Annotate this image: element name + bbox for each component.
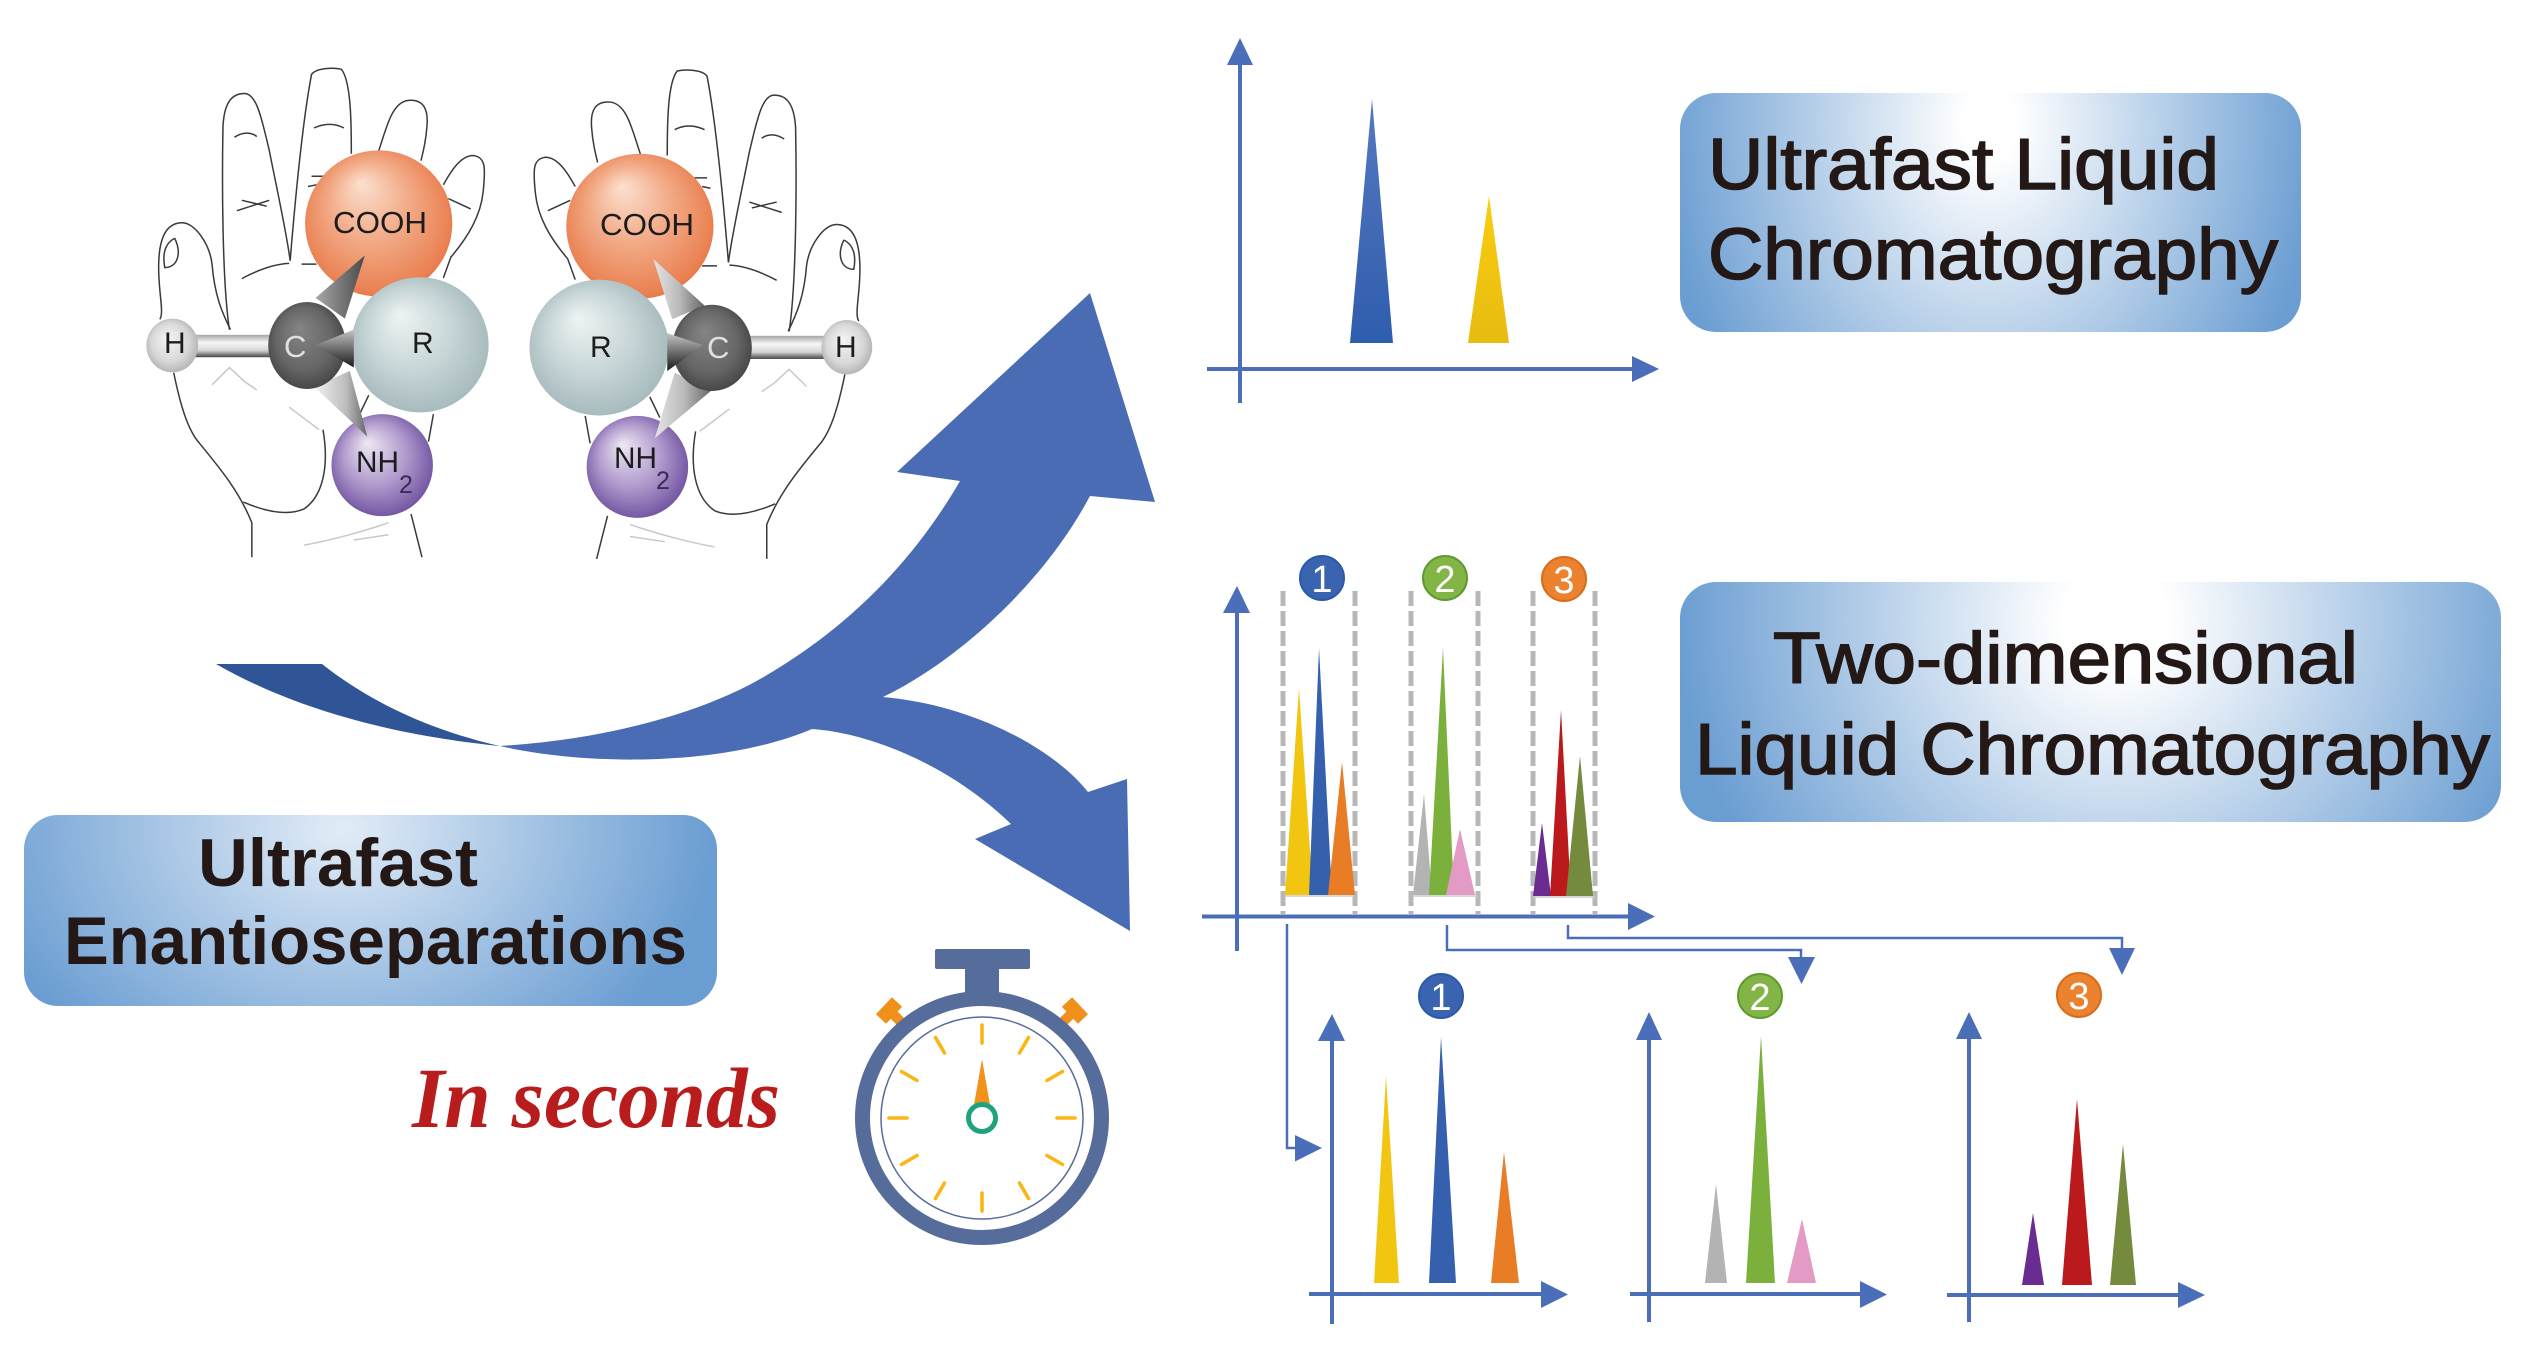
peak group 2	[1413, 648, 1475, 895]
left hand outline	[159, 68, 484, 557]
chart: second-dimension fraction 3	[1947, 973, 2205, 1322]
peak group 1	[1285, 648, 1355, 895]
label: Two-dimensional Liquid Chromatography: Two-dimensional	[1773, 619, 2358, 699]
arrow: transfer 1	[1287, 924, 1322, 1162]
chart: second-dimension fraction 1	[1309, 974, 1568, 1324]
text: In seconds: In seconds	[411, 1050, 780, 1146]
badge 2: 2	[1749, 977, 1771, 1019]
atom labels	[164, 205, 857, 499]
atom labels: R	[590, 331, 612, 364]
badge 1: 1	[1311, 559, 1333, 601]
atom labels: 2	[656, 467, 670, 495]
badge 3: 3	[1553, 560, 1575, 602]
label: Ultrafast Liquid Chromatography: Ultrafast Liquid	[1708, 125, 2219, 205]
badge 2	[1423, 556, 1467, 601]
atom labels: C	[284, 329, 306, 364]
badge 3	[2057, 973, 2101, 1018]
atom labels: C	[707, 330, 729, 365]
right hand with molecule	[529, 70, 872, 559]
badge 1: 1	[1430, 977, 1452, 1019]
atom labels: COOH	[600, 207, 694, 242]
right hand outline	[534, 70, 860, 559]
icon: stopwatch	[862, 949, 1102, 1238]
label: Ultrafast Enantioseparations	[24, 815, 717, 1006]
atom labels: 2	[399, 471, 413, 499]
label: Ultrafast Enantioseparations: Enantioseparations	[64, 903, 687, 979]
label: Ultrafast Enantioseparations: Ultrafast	[198, 825, 478, 901]
arrow: transfer 2	[1447, 925, 1815, 984]
badge 2	[1738, 974, 1782, 1019]
heart-cut windows	[1283, 591, 1595, 915]
left hand with molecule	[146, 68, 489, 557]
chart: second-dimension fraction 2	[1630, 974, 1887, 1322]
badge 3: 3	[2068, 976, 2090, 1018]
atom labels: H	[164, 327, 186, 360]
arrow: transfer 3	[1568, 925, 2135, 975]
label: Two-dimensional Liquid Chromatography	[1680, 582, 2501, 822]
arrow tail (dark twist)	[216, 664, 500, 746]
atom labels: COOH	[333, 205, 427, 240]
badge 1	[1300, 556, 1344, 601]
arrow body with two heads	[500, 293, 1155, 931]
chart: ultrafast LC chromatogram	[1207, 38, 1659, 403]
badge 1	[1419, 974, 1463, 1019]
atom labels: H	[835, 331, 857, 364]
label: Ultrafast Liquid Chromatography: Chromatography	[1708, 215, 2278, 295]
branching arrow	[216, 293, 1155, 931]
label: Ultrafast Liquid Chromatography	[1680, 93, 2301, 332]
badge 2: 2	[1434, 559, 1456, 601]
label: Two-dimensional Liquid Chromatography: Liquid Chromatography	[1695, 710, 2490, 790]
atom labels: NH	[356, 446, 399, 479]
atom labels: NH	[614, 442, 657, 475]
peak group 3	[1533, 710, 1593, 896]
chart: first-dimension chromatogram	[1202, 556, 1655, 951]
chiral molecules on hands	[146, 68, 872, 559]
badge 3	[1542, 557, 1586, 602]
atom labels: R	[412, 327, 434, 360]
